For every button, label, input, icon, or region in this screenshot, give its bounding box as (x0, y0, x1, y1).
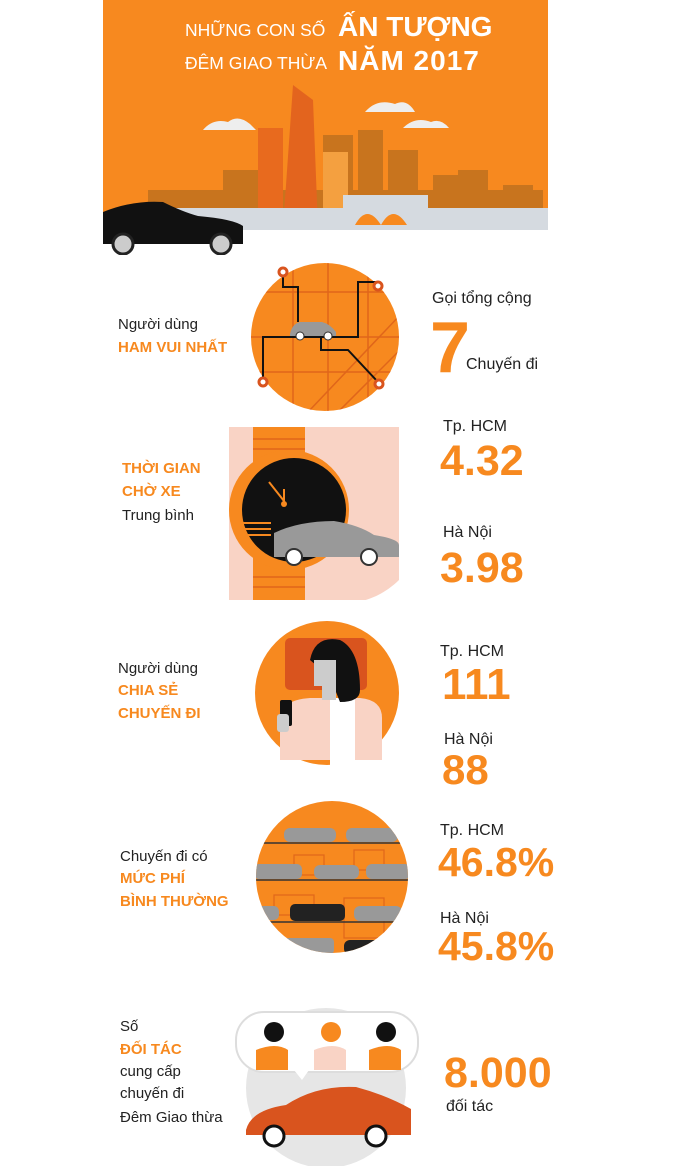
section 5 label: chuyến đi (120, 1085, 184, 1102)
section 1 label: Người dùng (118, 316, 198, 333)
section 4 stats (438, 822, 554, 969)
section 3 label: CHIA SẺ (118, 682, 178, 699)
section 3 stats: 88 (442, 746, 489, 793)
section 5 label (120, 1018, 223, 1126)
section 3 stats: Hà Nội (444, 731, 493, 748)
section 5 label: Số (120, 1018, 138, 1035)
section 4 stats: Hà Nội (440, 910, 489, 927)
section 3 stats: Tp. HCM (440, 643, 504, 660)
section 5 label: ĐỐI TÁC (120, 1041, 182, 1058)
section 2 stats (440, 418, 524, 592)
section 3 stats (440, 643, 511, 793)
section 1 stat: Chuyến đi (466, 356, 538, 373)
section 2 label: Trung bình (122, 507, 194, 524)
section 2 stats: Hà Nội (443, 524, 492, 541)
section 5 partners icon (235, 1008, 419, 1166)
section 1 map icon (251, 263, 399, 411)
section 5 stat: 8.000 (444, 1049, 552, 1097)
section 3 label (118, 660, 201, 722)
title: ẤN TƯỢNG (338, 11, 492, 42)
section 4 stats: Tp. HCM (440, 822, 504, 839)
section 4 stats: 45.8% (438, 923, 554, 969)
section 2 stats: 4.32 (440, 437, 524, 485)
section 2 label: THỜI GIAN (122, 460, 201, 477)
title: NĂM 2017 (338, 45, 480, 76)
section 5 label: cung cấp (120, 1063, 181, 1080)
section 2 stats: 3.98 (440, 544, 524, 592)
section 4 label: Chuyến đi có (120, 848, 208, 865)
title: ĐÊM GIAO THỪA (185, 53, 327, 73)
section 5 label: Đêm Giao thừa (120, 1109, 223, 1126)
section 3 label: Người dùng (118, 660, 198, 677)
section 1 label (118, 316, 227, 356)
section 2 stats: Tp. HCM (443, 418, 507, 435)
section 4 label: MỨC PHÍ (120, 870, 185, 887)
header panel (103, 0, 548, 255)
section 5 stat: đối tác (446, 1098, 493, 1115)
section 1 stat (430, 290, 538, 388)
section 1 stat: 7 (430, 308, 470, 388)
section 4 stats: 46.8% (438, 839, 554, 885)
section 3 stats: 111 (442, 660, 511, 709)
section 3 label: CHUYẾN ĐI (118, 705, 201, 722)
section 2 label (122, 460, 201, 524)
section 2 watch icon (229, 427, 399, 600)
section 4 label (120, 848, 229, 910)
section 4 label: BÌNH THƯỜNG (120, 893, 229, 910)
title: NHỮNG CON SỐ (185, 20, 325, 40)
black car (103, 202, 243, 244)
section 3 person icon (255, 621, 399, 765)
section 2 label: CHỜ XE (122, 483, 181, 500)
section 1 label: HAM VUI NHẤT (118, 339, 227, 356)
title (185, 11, 492, 76)
section 4 cars icon (256, 801, 408, 953)
clouds (198, 118, 256, 130)
section 1 stat: Gọi tổng cộng (432, 290, 532, 307)
